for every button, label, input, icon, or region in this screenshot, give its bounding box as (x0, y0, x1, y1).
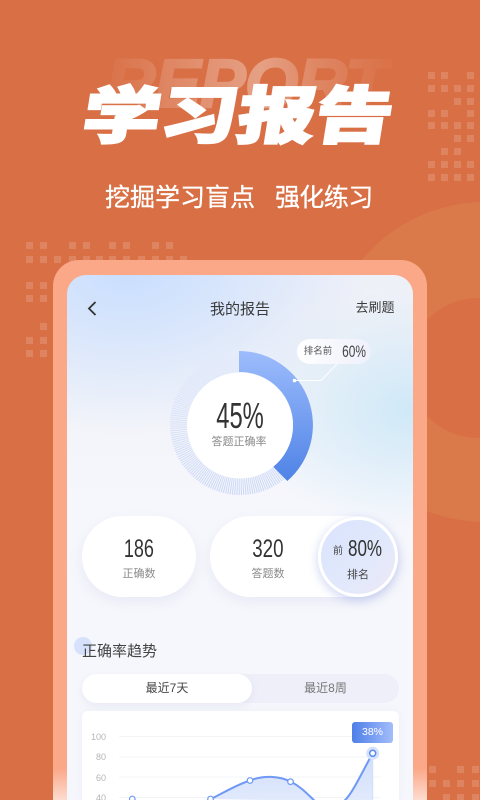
subtitle: 挖掘学习盲点 强化练习 (105, 184, 373, 212)
link: practice: 去刷题 (355, 300, 394, 315)
phone screen panel (67, 275, 413, 800)
label: 答题数 (252, 568, 284, 580)
prefix: 前 (333, 546, 343, 557)
inner circle decoration (408, 298, 480, 438)
line chart (91, 732, 380, 800)
highlighted point (366, 747, 379, 760)
axis labels: 60 (96, 773, 106, 783)
donut value: 45% (216, 395, 264, 436)
frame bottom fade (53, 772, 427, 800)
value tag 38%: 38% (362, 726, 383, 738)
trend line (211, 753, 373, 800)
progress arc 45% (239, 351, 313, 481)
heading dot (74, 637, 92, 655)
title: 学习报告 (78, 83, 399, 152)
tab track (82, 674, 399, 703)
rank badge (318, 517, 398, 597)
ghost word REPORT: REPORT (106, 45, 386, 122)
stat pill: correct count (82, 516, 196, 597)
callout value: 60% (342, 342, 366, 361)
data points (130, 778, 293, 800)
callout connector (292, 364, 338, 382)
tab active (82, 674, 252, 703)
donut chart (170, 351, 313, 495)
value 320: 320 (252, 535, 284, 563)
tick ring (179, 364, 301, 486)
callout label: 排名前 (304, 346, 332, 357)
section heading: 正确率趋势 (82, 643, 157, 660)
axis labels: 80 (96, 752, 106, 762)
donut label: 答题正确率 (212, 436, 266, 448)
label: 正确数 (122, 568, 156, 580)
center disc (187, 372, 293, 478)
axis labels (91, 732, 106, 800)
axis labels: 100 (91, 732, 106, 742)
stat pill: answered count (210, 516, 398, 597)
background circle decoration (325, 202, 480, 522)
callout: rank top 60% (297, 339, 371, 364)
tab active: 最近7天 (146, 681, 188, 695)
value 186: 186 (124, 535, 154, 563)
value 80%: 80% (348, 535, 382, 561)
chart card (82, 711, 399, 800)
area (211, 753, 373, 800)
icon: back arrow (88, 301, 96, 316)
phone frame (53, 260, 427, 800)
label: 排名 (347, 569, 369, 581)
screen title: 我的报告 (210, 301, 270, 318)
value tag 38% (352, 722, 393, 743)
tab inactive: 最近8周 (304, 681, 347, 695)
